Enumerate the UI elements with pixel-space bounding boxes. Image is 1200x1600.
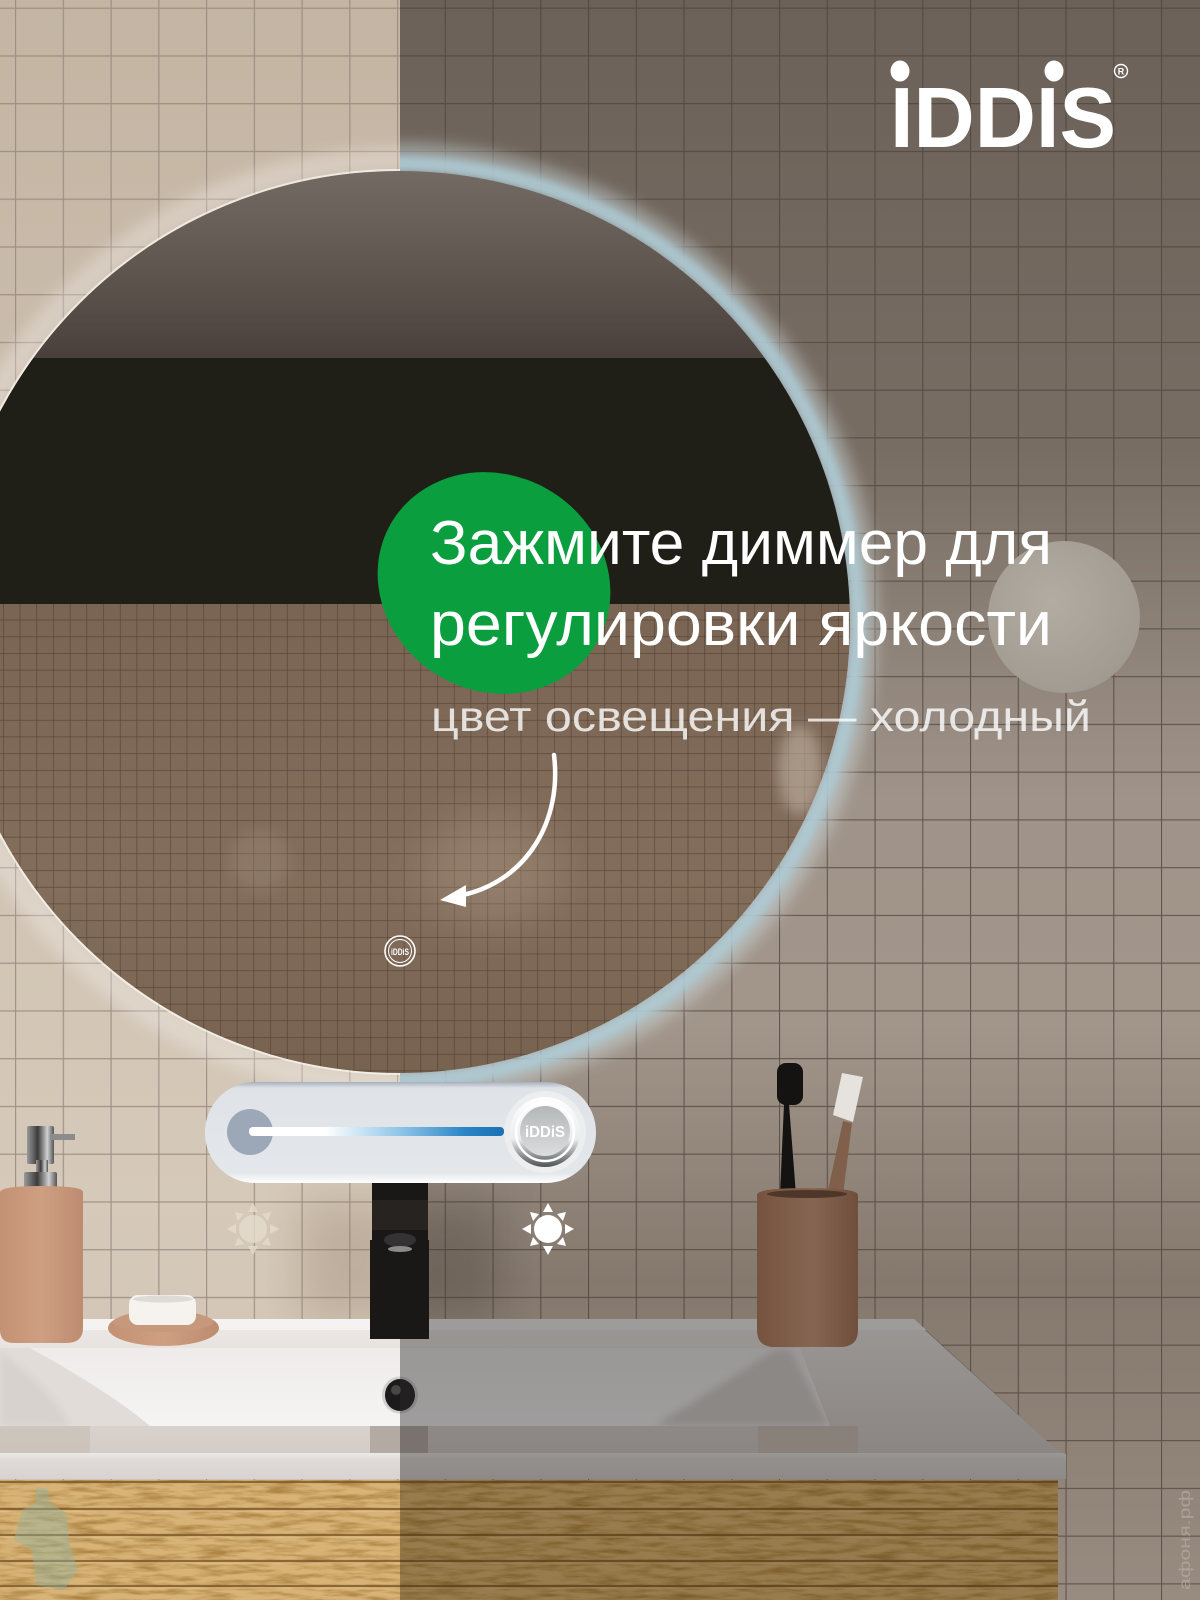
toothbrush: bamboo xyxy=(827,1073,863,1195)
mirror reflection: dark band xyxy=(0,358,860,604)
mirror reflection: mosaic wall xyxy=(0,604,860,1074)
basin xyxy=(0,1348,830,1426)
wood cabinet xyxy=(0,1480,1058,1600)
tiled wall: cool right half xyxy=(390,0,1200,1600)
watermark text: афоня.рф xyxy=(1177,1490,1194,1590)
faucet xyxy=(370,1183,429,1339)
heading: регулировки яркости xyxy=(430,590,1052,659)
mirror reflection: ceiling xyxy=(34,171,764,358)
round mirror xyxy=(0,171,860,1074)
arrow to dimmer xyxy=(440,755,555,907)
icon: dim sun xyxy=(227,1203,279,1255)
slider knob xyxy=(504,1091,586,1173)
mirror glow: cold right xyxy=(400,136,884,1082)
icon: bright sun xyxy=(522,1203,574,1255)
slider knob: iDDiS xyxy=(525,1124,565,1141)
backsplash lip xyxy=(0,1319,926,1330)
toothbrush: black xyxy=(777,1063,803,1195)
heading xyxy=(430,509,1052,659)
soap dish xyxy=(108,1295,219,1346)
tiled wall: warm left half xyxy=(0,0,410,1600)
watermark figure xyxy=(14,1487,78,1590)
sink front edge xyxy=(0,1453,1066,1479)
deck reflections xyxy=(0,1426,858,1453)
toothbrush cup xyxy=(757,1188,858,1347)
green accent blob xyxy=(337,430,651,736)
registered mark: R xyxy=(1118,66,1125,76)
basin folds xyxy=(0,1348,830,1426)
low-brightness dot xyxy=(227,1109,273,1155)
heading: Зажмите диммер для xyxy=(430,509,1052,578)
dimmer button on mirror: iDDiS xyxy=(391,947,409,958)
soap dispenser xyxy=(0,1126,83,1343)
subheading: цвет освещения — холодный xyxy=(431,693,1091,741)
countertop xyxy=(0,1330,1060,1453)
wall sphere lamp xyxy=(988,541,1140,693)
slider track xyxy=(249,1127,504,1136)
dimmer button on mirror xyxy=(385,936,415,966)
cold-side dim overlay: sink xyxy=(400,1319,1066,1479)
logo: IDDIS xyxy=(890,71,1116,166)
mirror glow: warm left xyxy=(0,142,400,1082)
registered mark xyxy=(1114,64,1128,78)
vanity: sink and wood cabinet xyxy=(0,1319,1066,1600)
brightness control pill xyxy=(205,1082,596,1183)
cold-side dim overlay: wood xyxy=(400,1480,1058,1600)
drain xyxy=(382,1376,418,1414)
